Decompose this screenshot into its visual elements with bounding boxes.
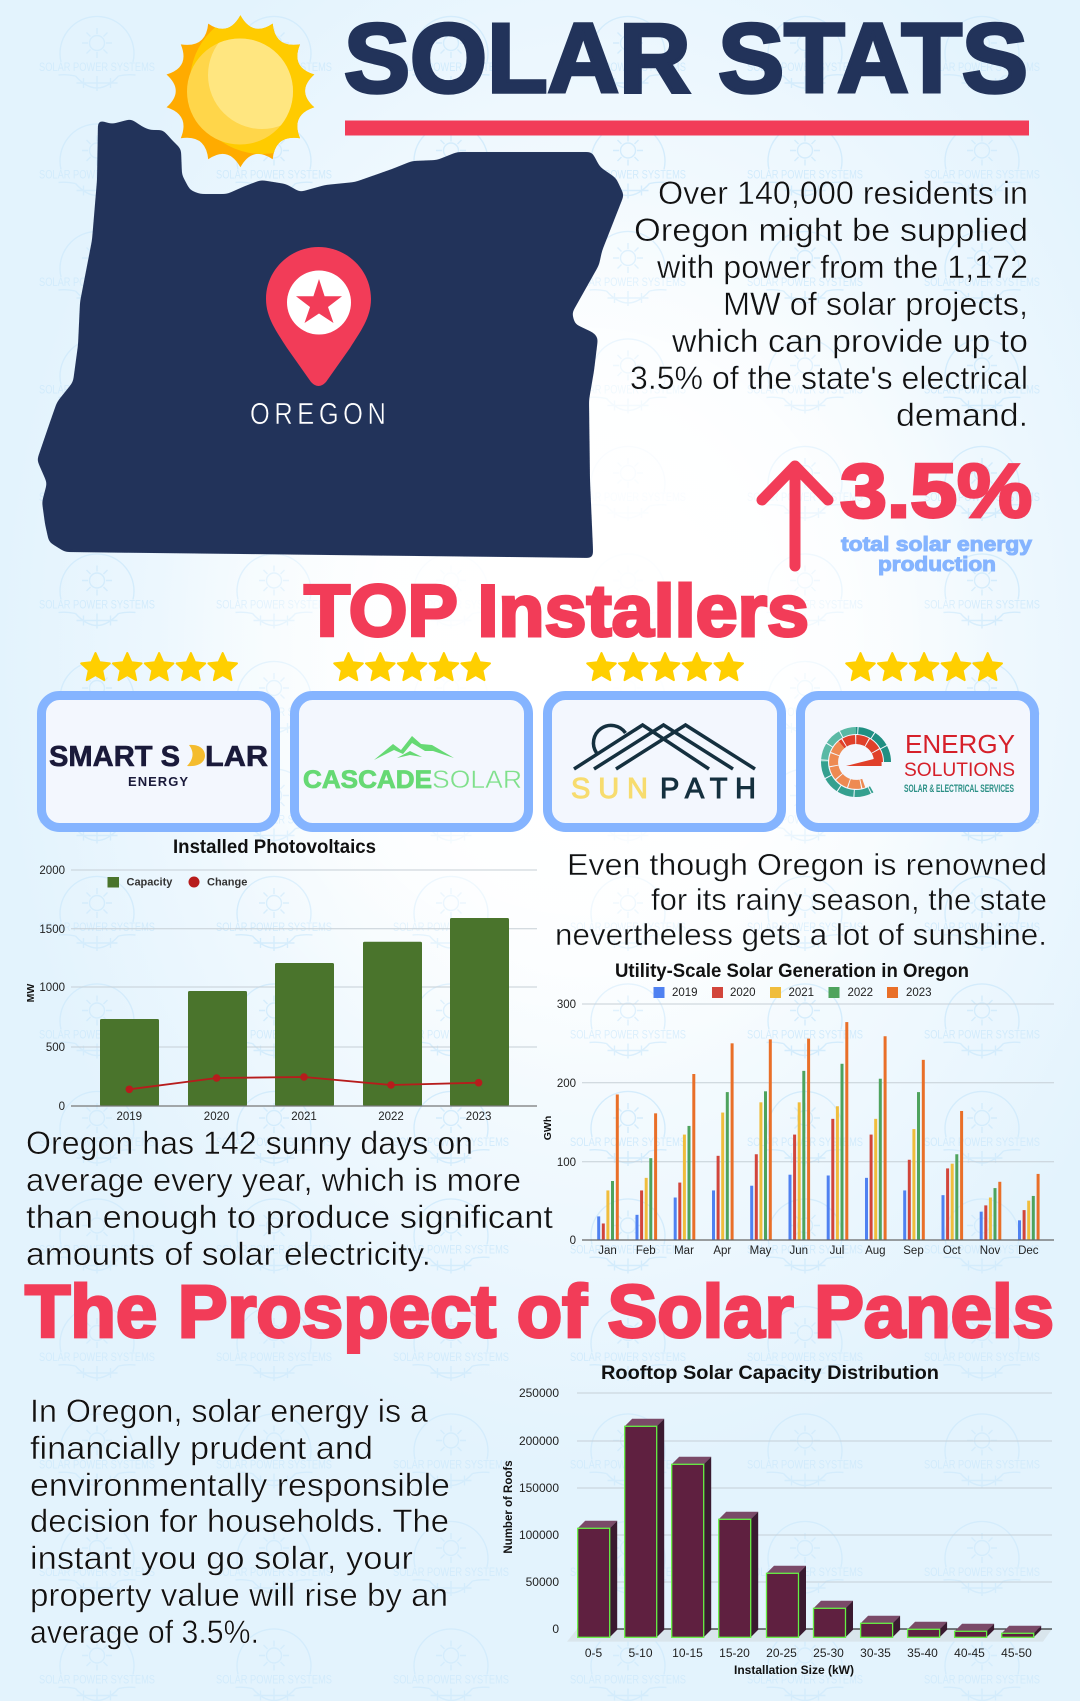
x axis labels bbox=[117, 1111, 491, 1123]
x axis labels: 2022 bbox=[378, 1111, 404, 1123]
month labels: Jun bbox=[790, 1245, 808, 1257]
x axis labels: 2023 bbox=[466, 1111, 491, 1123]
heading: the prospect of solar panels: The Prospect of Solar Panels bbox=[25, 1270, 1054, 1353]
x axis labels: 2020 bbox=[204, 1111, 229, 1123]
x axis labels: 15-20 bbox=[719, 1646, 750, 1660]
stat caption bbox=[841, 534, 1033, 576]
y axis labels: 0 bbox=[59, 1101, 65, 1113]
month labels: May bbox=[750, 1245, 772, 1257]
text block: sunny days bbox=[26, 1125, 553, 1272]
y axis labels bbox=[519, 1386, 559, 1636]
card: smart solar energy bbox=[42, 696, 276, 828]
change line bbox=[126, 1073, 482, 1093]
text block: rainy season bbox=[555, 848, 1047, 952]
title underline bbox=[345, 120, 1029, 136]
month labels bbox=[598, 1245, 1039, 1257]
card: sunpath: SUN bbox=[571, 773, 648, 805]
y axis labels: 250000 bbox=[519, 1386, 559, 1400]
y axis labels: 2000 bbox=[39, 865, 65, 877]
text block: financially prudent: average of 3.5%. bbox=[30, 1614, 259, 1650]
month labels: Jul bbox=[830, 1245, 844, 1257]
text block: residents intro: 3.5% of the state's electrical bbox=[630, 360, 1028, 396]
y axis labels: 150000 bbox=[519, 1481, 559, 1495]
stat caption: total solar energy bbox=[841, 534, 1033, 556]
heading: top installers: TOP Installers bbox=[304, 571, 809, 652]
text block: financially prudent: instant you go solar, your bbox=[30, 1540, 413, 1576]
text block: rainy season: for its rainy season, the state bbox=[651, 883, 1047, 917]
y axis labels: 50000 bbox=[526, 1575, 559, 1589]
text block: residents intro: with power from the 1,172 bbox=[656, 249, 1028, 285]
text block: sunny days: than enough to produce significant bbox=[26, 1199, 553, 1235]
text block: residents intro: Oregon might be supplied bbox=[634, 212, 1028, 248]
month labels: Mar bbox=[674, 1245, 694, 1257]
icon: sun bbox=[166, 15, 316, 167]
grouped monthly bars bbox=[597, 1022, 1040, 1240]
x axis labels: 10-15 bbox=[672, 1646, 703, 1660]
text block: residents intro: Over 140,000 residents in bbox=[658, 175, 1028, 211]
y axis labels: 0 bbox=[552, 1622, 559, 1636]
rating stars: cascade solar bbox=[334, 653, 490, 680]
stat: 3.5 percent: 3.5% bbox=[840, 449, 1032, 534]
text block: financially prudent: environmentally responsible bbox=[30, 1467, 450, 1503]
rating stars: energy solutions bbox=[846, 653, 1002, 680]
rating stars: smart solar bbox=[81, 653, 237, 680]
card: smart solar energy: LAR bbox=[205, 741, 268, 773]
y axis labels: 100 bbox=[557, 1157, 576, 1169]
card: cascade solar: SOLAR bbox=[432, 766, 522, 794]
map label: OREGON bbox=[250, 397, 390, 432]
x axis labels: 30-35 bbox=[860, 1646, 891, 1660]
map: Oregon state silhouette bbox=[37, 119, 624, 558]
y axis title: MW bbox=[25, 984, 37, 1002]
x axis labels: 20-25 bbox=[766, 1646, 797, 1660]
x axis labels bbox=[585, 1646, 1032, 1660]
y axis labels: 200 bbox=[557, 1078, 576, 1090]
chart title: Installed Photovoltaics bbox=[173, 837, 376, 858]
card: cascade solar bbox=[294, 696, 528, 828]
month labels: Sep bbox=[903, 1245, 924, 1257]
y axis labels: 300 bbox=[557, 999, 576, 1011]
text block: sunny days: average every year, which is more bbox=[26, 1162, 521, 1198]
x axis labels: 0-5 bbox=[585, 1646, 602, 1660]
card: sunpath bbox=[548, 696, 782, 828]
y axis labels: 500 bbox=[46, 1042, 65, 1054]
y axis title: GWh bbox=[542, 1116, 554, 1140]
x axis labels: 25-30 bbox=[813, 1646, 844, 1660]
text block: residents intro: MW of solar projects, bbox=[723, 286, 1028, 322]
text block: rainy season: Even though Oregon is renowned bbox=[567, 848, 1047, 882]
map pin bbox=[266, 247, 371, 386]
chart title: Utility-Scale Solar Generation in Oregon bbox=[615, 960, 969, 982]
legend: Change bbox=[207, 876, 247, 888]
chart: rooftop solar capacity distribution bbox=[503, 1362, 1052, 1677]
y axis labels bbox=[39, 865, 65, 1113]
rating stars: sunpath bbox=[587, 653, 743, 680]
chart: installed photovoltaics bbox=[25, 837, 537, 1123]
y axis labels: 0 bbox=[570, 1235, 576, 1247]
card: smart solar energy: ENERGY bbox=[128, 774, 188, 789]
text block: financially prudent bbox=[30, 1393, 450, 1650]
text block: rainy season: nevertheless gets a lot of sunshine. bbox=[555, 918, 1047, 952]
card: cascade solar: CASCADE bbox=[303, 766, 432, 794]
3D bars bbox=[578, 1419, 1041, 1637]
card: energy solutions: ENERGY bbox=[905, 729, 1015, 759]
y axis labels: 200000 bbox=[519, 1434, 559, 1448]
capacity bars bbox=[100, 918, 509, 1106]
month labels: Aug bbox=[865, 1245, 886, 1257]
chart title: Rooftop Solar Capacity Distribution bbox=[601, 1362, 939, 1384]
text block: residents intro bbox=[630, 175, 1028, 433]
legend: 2023 bbox=[906, 987, 932, 999]
text block: residents intro: demand. bbox=[896, 397, 1028, 433]
legend: 2022 bbox=[848, 987, 873, 999]
x axis labels: 2021 bbox=[291, 1111, 317, 1123]
text block: sunny days: amounts of solar electricity. bbox=[26, 1236, 431, 1272]
x axis labels: 45-50 bbox=[1001, 1646, 1032, 1660]
stat caption: production bbox=[878, 554, 996, 576]
card: energy solutions: SOLUTIONS bbox=[904, 759, 1015, 781]
y axis labels: 1000 bbox=[39, 982, 65, 994]
stat: 3.5 percent bbox=[840, 449, 1033, 576]
text block: financially prudent: In Oregon, solar energy is a bbox=[30, 1393, 428, 1429]
card: energy solutions: SOLAR & ELECTRICAL SERVICES bbox=[904, 783, 1014, 795]
x axis labels: 40-45 bbox=[954, 1646, 985, 1660]
text block: sunny days: Oregon has 142 sunny days on bbox=[26, 1125, 473, 1161]
x axis labels: 35-40 bbox=[907, 1646, 938, 1660]
legend bbox=[108, 876, 247, 888]
arrow up bbox=[762, 466, 828, 566]
legend: 2020 bbox=[730, 987, 756, 999]
x axis title: Installation Size (kW) bbox=[734, 1663, 854, 1677]
title: SOLAR STATS bbox=[344, 3, 1028, 113]
x axis labels: 2019 bbox=[117, 1111, 142, 1123]
legend: 2019 bbox=[672, 987, 698, 999]
text block: residents intro: which can provide up to bbox=[671, 323, 1028, 359]
legend: 2021 bbox=[788, 987, 814, 999]
month labels: Nov bbox=[980, 1245, 1000, 1257]
text block: financially prudent: property value will rise by an bbox=[30, 1577, 448, 1613]
legend bbox=[654, 987, 932, 999]
month labels: Dec bbox=[1018, 1245, 1039, 1257]
card: sunpath: PATH bbox=[660, 773, 756, 805]
x axis labels: 5-10 bbox=[628, 1646, 653, 1660]
month labels: Jan bbox=[598, 1245, 617, 1257]
chart: utility-scale solar generation bbox=[542, 960, 1054, 1257]
month labels: Feb bbox=[636, 1245, 656, 1257]
month labels: Apr bbox=[713, 1245, 731, 1257]
card: smart solar energy: SMART S bbox=[49, 741, 180, 773]
text block: financially prudent: financially prudent and bbox=[30, 1430, 373, 1466]
y axis labels: 100000 bbox=[519, 1528, 559, 1542]
y axis labels: 1500 bbox=[39, 924, 65, 936]
card: energy solutions bbox=[800, 696, 1034, 828]
month labels: Oct bbox=[943, 1245, 962, 1257]
text block: financially prudent: decision for households. The bbox=[30, 1503, 449, 1539]
y axis labels bbox=[557, 999, 576, 1247]
y axis title: Number of Roofs bbox=[503, 1460, 515, 1554]
legend: Capacity bbox=[126, 876, 173, 888]
